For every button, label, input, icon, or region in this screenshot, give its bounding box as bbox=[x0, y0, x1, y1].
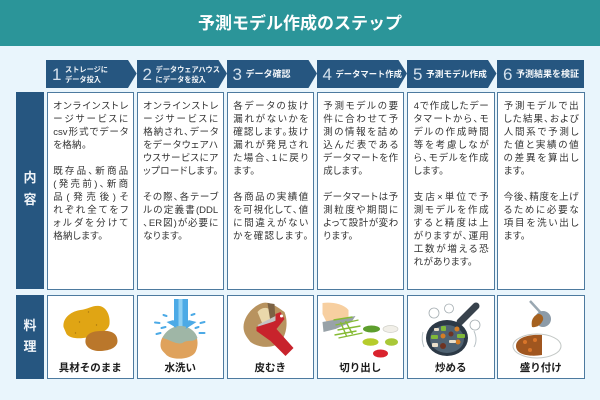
panel: step 5 text: 工数が増える恐 bbox=[414, 244, 489, 255]
panel: step 5 text: ら、モデルを作成 bbox=[414, 153, 489, 164]
panel: step 2 text bbox=[136, 92, 224, 290]
step header 5: 予測モデル作成 bbox=[426, 69, 487, 79]
panel: cutting: 切り出し bbox=[339, 362, 381, 374]
panel: step 1 text: 既存品、新商品 bbox=[53, 166, 128, 177]
panel: stir-frying bbox=[407, 295, 494, 379]
icon: potatoes bbox=[63, 306, 118, 351]
panel: step 6 text: ます。 bbox=[504, 231, 526, 242]
panel: step 5 text: 4で作成したデー bbox=[414, 100, 489, 112]
panel: step 1 text: ォルダを分けて bbox=[53, 218, 128, 229]
panel: step 1 text bbox=[46, 92, 134, 290]
panel: step 3 text: 各商品の実績値 bbox=[233, 192, 308, 203]
panel: step 2 text: 、ER図)が必要に bbox=[143, 218, 218, 229]
panel: cutting bbox=[316, 295, 404, 379]
icon: potato under running water bbox=[154, 299, 206, 359]
panel: step 5 text: 支店×単位で予 bbox=[414, 192, 489, 203]
panel: step 4 text: よって設計が変わ bbox=[323, 218, 398, 229]
panel: step 6 text: した結果、および bbox=[504, 114, 579, 125]
panel: step 1 text: csv形式でデータ bbox=[53, 127, 128, 138]
panel: step 2 text: なります。 bbox=[143, 231, 183, 242]
panel: step 1 text: を格納。 bbox=[53, 140, 87, 151]
panel: step 6 text: た値と実績の値 bbox=[504, 140, 579, 151]
panel: step 2 text: 格納され、データ bbox=[143, 127, 218, 138]
panel: step 2 text: ージサービスに bbox=[143, 114, 218, 125]
step header 1 bbox=[46, 60, 137, 88]
step header 6: 予測結果を検証 bbox=[516, 69, 579, 79]
panel: step 3 text: 漏れがないかを bbox=[233, 114, 308, 125]
row label: cooking bbox=[16, 295, 44, 379]
panel: step 6 text: ます。 bbox=[504, 166, 526, 177]
panel: step 4 text: データマートは予 bbox=[323, 192, 398, 203]
panel: step 4 text: 測粒度や期間に bbox=[323, 205, 398, 216]
row label: cooking: 理 bbox=[23, 339, 36, 354]
panel: step 4 text: 込んだ表である bbox=[323, 140, 398, 151]
panel: step 5 text: がりますが、運用 bbox=[414, 231, 489, 242]
panel: plating bbox=[497, 295, 584, 379]
panel: step 1 text: れぞれ全てをフ bbox=[53, 205, 128, 216]
panel: step 6 text: 項目を洗い出し bbox=[504, 218, 579, 229]
panel: step 5 text: 測モデルを作成 bbox=[414, 205, 489, 216]
step header 3: データ確認 bbox=[246, 69, 291, 79]
panel: step 3 text: に間違えがない bbox=[233, 218, 308, 229]
step header 4: 4 bbox=[322, 65, 332, 84]
panel: step 1 text: ージサービスに bbox=[53, 114, 128, 125]
step header 5 bbox=[407, 60, 496, 88]
panel: step 3 text: かを確認します。 bbox=[233, 231, 308, 242]
step header 4 bbox=[317, 60, 407, 88]
row label: contents bbox=[16, 92, 44, 289]
step header 2: にデータを投入 bbox=[156, 74, 206, 84]
panel: step 5 text: します。 bbox=[414, 166, 444, 177]
panel: step 1 text: 格納します。 bbox=[53, 231, 103, 242]
panel: step 4 text: 予測モデルの要 bbox=[323, 100, 398, 112]
step header 3: 3 bbox=[232, 65, 242, 84]
step header 1: ストレージに bbox=[65, 65, 108, 74]
panel: step 6 text: るために必要な bbox=[504, 205, 579, 216]
panel: step 6 text bbox=[497, 92, 584, 290]
panel: step 4 text: ります。 bbox=[323, 231, 353, 242]
panel: step 3 text: ます。 bbox=[233, 166, 255, 177]
panel: step 5 text: すると精度は上 bbox=[414, 218, 489, 229]
panel: step 2 text: その際、各テーブ bbox=[143, 192, 218, 203]
panel: raw ingredients bbox=[46, 295, 134, 379]
step header 6: 6 bbox=[503, 65, 512, 84]
panel: step 2 text: ップロードします。 bbox=[143, 166, 218, 177]
panel: step 1 text: オンラインストレ bbox=[53, 100, 128, 112]
step header 6 bbox=[497, 60, 584, 88]
panel: step 2 text: ルの定義書(DDL bbox=[143, 205, 218, 216]
panel: raw ingredients: 具材そのまま bbox=[59, 362, 122, 374]
step header 2: データウェアハウス bbox=[156, 65, 220, 74]
panel: step 1 text: 品(発売後)そ bbox=[53, 192, 128, 203]
panel: plating: 盛り付け bbox=[520, 362, 562, 374]
row label: contents: 内 bbox=[23, 170, 36, 185]
panel: step 3 text: た場合、1に戻り bbox=[233, 153, 308, 164]
panel: step 3 text bbox=[226, 92, 314, 290]
panel: step 6 text: の差異を算出し bbox=[504, 153, 579, 164]
panel: step 1 text: (発売前)、新商 bbox=[53, 179, 128, 190]
panel: step 6 text: 予測モデルで出 bbox=[504, 100, 579, 112]
row label: cooking: 料 bbox=[23, 318, 36, 333]
panel: step 4 text: 測の情報を詰め bbox=[323, 127, 398, 138]
panel: washing: 水洗い bbox=[164, 362, 196, 374]
panel: step 2 text: をデータウェアハ bbox=[143, 140, 218, 151]
icon: curry plate and ladle bbox=[512, 300, 562, 358]
panel: step 4 text bbox=[316, 92, 404, 290]
icon: peeler on potato bbox=[244, 302, 294, 356]
step header 4: データマート作成 bbox=[336, 69, 402, 79]
panel: washing bbox=[136, 295, 224, 379]
icon: frying pan bbox=[422, 302, 480, 356]
panel: peeling bbox=[226, 295, 314, 379]
step header 1: 1 bbox=[52, 65, 61, 84]
panel: step 5 text: デルの作成時間 bbox=[414, 127, 489, 138]
panel: step 6 text: 今後、精度を上げ bbox=[504, 192, 579, 203]
panel: step 5 text: タマートから、モ bbox=[414, 114, 489, 125]
row label: contents: 容 bbox=[23, 192, 36, 207]
title: 予測モデル作成のステップ bbox=[198, 14, 402, 33]
panel: step 6 text: 人間系で予測し bbox=[504, 127, 579, 138]
panel: step 5 text: 等を考慮しなが bbox=[414, 140, 489, 151]
step header 3 bbox=[227, 60, 317, 88]
panel: step 4 text: 件に合わせて予 bbox=[323, 114, 398, 125]
step header 2: 2 bbox=[142, 65, 152, 84]
panel: peeling: 皮むき bbox=[254, 362, 286, 374]
panel: step 3 text: を可視化して、値 bbox=[233, 205, 308, 216]
step header 5: 5 bbox=[413, 65, 422, 84]
step header 2 bbox=[137, 60, 227, 88]
panel: step 2 text: オンラインストレ bbox=[143, 100, 218, 112]
panel: step 5 text bbox=[407, 92, 494, 290]
panel: step 3 text: 各データの抜け bbox=[233, 100, 308, 112]
panel: step 4 text: データマートを作 bbox=[323, 153, 398, 164]
step header 1: データ投入 bbox=[65, 74, 101, 84]
title bbox=[0, 0, 600, 46]
panel: stir-frying: 炒める bbox=[435, 362, 466, 374]
panel: step 5 text: れがあります。 bbox=[414, 257, 473, 268]
panel: step 3 text: 漏れが発見され bbox=[233, 140, 308, 151]
panel: step 3 text: 確認します。抜け bbox=[233, 127, 308, 138]
icon: knife and sliced vegetables bbox=[322, 302, 398, 358]
panel: step 2 text: ウスサービスにア bbox=[143, 153, 218, 164]
panel: step 4 text: 成します。 bbox=[323, 166, 363, 177]
